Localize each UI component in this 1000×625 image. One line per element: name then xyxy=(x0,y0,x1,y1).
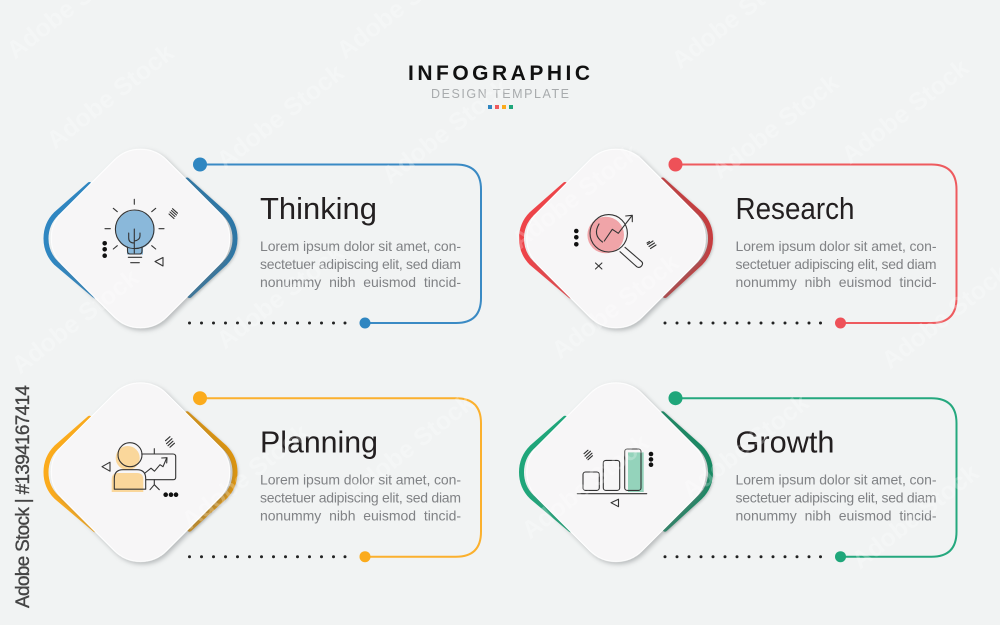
heading: thinking: Thinking xyxy=(260,191,377,226)
watermark text: Adobe Stock xyxy=(376,74,514,190)
left bracket: growth xyxy=(521,418,570,530)
colour swatch row xyxy=(488,105,513,109)
right bracket: planning xyxy=(187,414,235,529)
diamond card: planning xyxy=(36,368,245,577)
watermark text: Adobe Stock xyxy=(211,239,349,355)
text block: research: Lorem ipsum dolor sit amet, con- xyxy=(736,238,937,254)
watermark text: Adobe Stock xyxy=(176,419,314,535)
text block: research xyxy=(736,238,937,290)
dotted rule: research xyxy=(664,322,822,324)
left bracket: thinking xyxy=(46,184,95,296)
heading: research: Research xyxy=(736,191,854,226)
dotted rule: growth xyxy=(664,555,822,558)
subtitle: design template: DESIGN TEMPLATE xyxy=(431,87,569,101)
watermark text: Adobe Stock xyxy=(506,139,644,255)
text block: thinking: nonummy nibh euismod tincid- xyxy=(260,274,461,290)
text block: planning: nonummy nibh euismod tincid- xyxy=(260,508,461,524)
watermark text: Adobe Stock xyxy=(546,249,684,365)
text block: growth: nonummy nibh euismod tincid- xyxy=(736,508,937,524)
watermark text: Adobe Stock xyxy=(6,264,144,380)
heading: planning: Planning xyxy=(260,425,378,460)
text block: planning: Lorem ipsum dolor sit amet, con- xyxy=(260,472,461,488)
icon: light bulb xyxy=(102,199,178,266)
text block: growth: Lorem ipsum dolor sit amet, con- xyxy=(736,472,937,488)
dotted rule: planning xyxy=(188,555,346,558)
stock id label: Adobe Stock | #1394167414 xyxy=(13,385,34,608)
panel: planning xyxy=(36,368,481,577)
text block: planning xyxy=(260,472,461,524)
text block: research: nonummy nibh euismod tincid- xyxy=(736,274,937,290)
diamond card: growth xyxy=(511,368,721,577)
text block: growth: sectetuer adipiscing elit, sed diam xyxy=(736,490,936,506)
text block: thinking xyxy=(260,238,461,290)
connector line: planning xyxy=(193,391,481,562)
panel: thinking xyxy=(36,134,481,343)
watermark text: Adobe Stock xyxy=(836,54,974,170)
watermark text: Adobe Stock xyxy=(516,429,654,545)
watermark text: Adobe Stock xyxy=(41,39,179,155)
icon: presenter with chart board xyxy=(102,437,178,497)
watermark text: Adobe Stock xyxy=(211,59,349,175)
icon: bar chart xyxy=(577,449,653,507)
text block: thinking: sectetuer adipiscing elit, sed diam xyxy=(260,256,461,272)
title: INFOGRAPHIC: INFOGRAPHIC xyxy=(408,62,590,85)
text block: thinking: Lorem ipsum dolor sit amet, con- xyxy=(260,238,461,254)
heading: growth: Growth xyxy=(736,425,834,460)
text block: growth xyxy=(736,472,937,524)
diamond card: thinking xyxy=(36,134,245,343)
connector line: thinking xyxy=(193,158,481,328)
diamond card: research xyxy=(511,134,721,343)
dotted rule: thinking xyxy=(188,322,346,324)
text block: research: sectetuer adipiscing elit, sed diam xyxy=(736,256,936,272)
panel: research xyxy=(511,134,956,343)
watermark text: Adobe Stock xyxy=(341,389,479,505)
watermark text: Adobe Stock xyxy=(706,69,844,185)
right bracket: research xyxy=(662,180,711,296)
right bracket: thinking xyxy=(187,180,235,296)
left bracket: planning xyxy=(46,418,95,530)
right bracket: growth xyxy=(662,414,711,529)
icon: magnifier with growth arrow xyxy=(574,215,656,269)
panel: growth xyxy=(511,368,956,577)
connector line: growth xyxy=(668,391,956,562)
connector line: research xyxy=(668,158,956,328)
text block: planning: sectetuer adipiscing elit, sed diam xyxy=(260,490,461,506)
watermark text: Adobe Stock xyxy=(846,459,984,575)
left bracket: research xyxy=(521,184,570,296)
watermark text: Adobe Stock xyxy=(676,389,814,505)
